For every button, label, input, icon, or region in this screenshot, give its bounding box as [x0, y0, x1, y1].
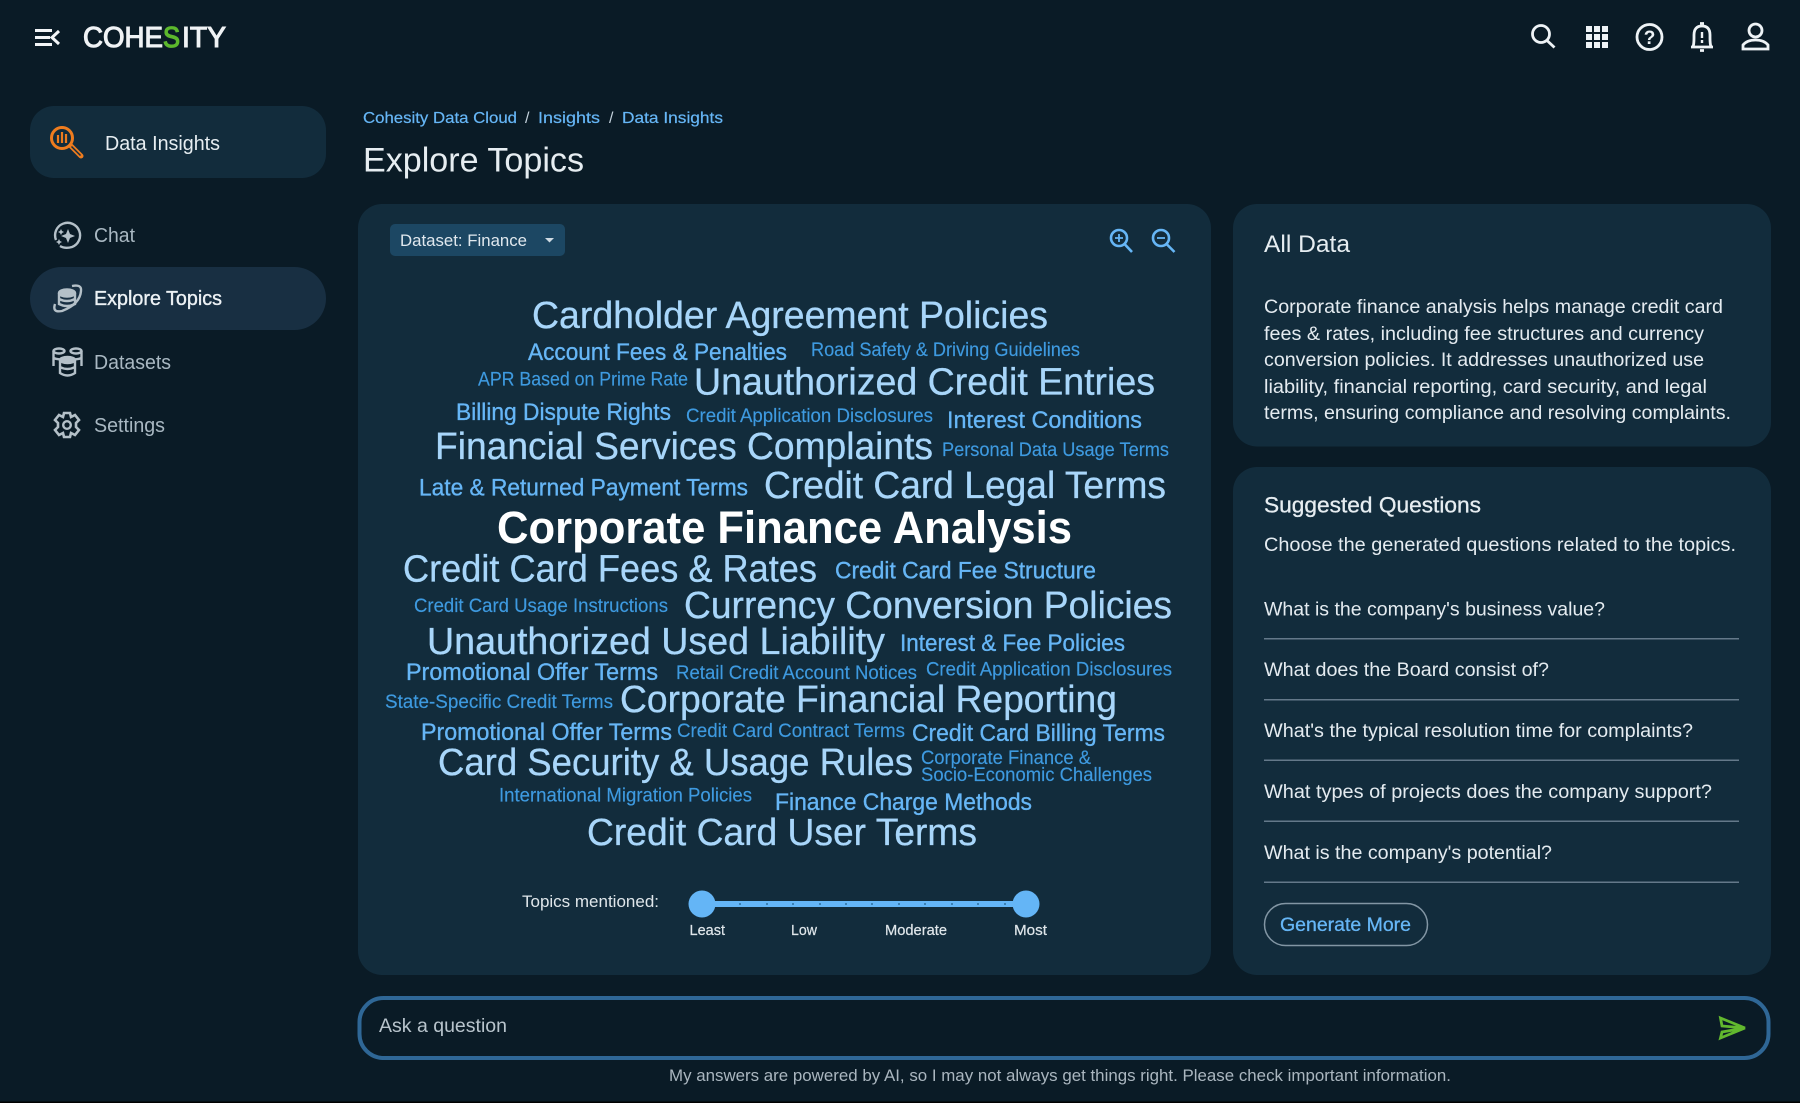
logo: ITY [182, 22, 226, 54]
word cloud: Credit Card Usage Instructions [414, 596, 668, 617]
icon: search [1532, 26, 1554, 48]
word cloud: Credit Card Contract Terms [677, 721, 905, 742]
question list: What types of projects does the company support? [1264, 782, 1712, 803]
question list: What's the typical resolution time for complaints? [1264, 721, 1693, 742]
panel: all data [1233, 204, 1771, 446]
breadcrumb: / [609, 110, 614, 127]
breadcrumb: / [525, 110, 530, 127]
icon: menu toggle [35, 29, 59, 46]
icon: explore topics database [54, 286, 81, 311]
icon: help [1637, 24, 1662, 50]
word cloud: Credit Card Legal Terms [764, 465, 1166, 507]
instruction text: Choose the generated questions related to the topics. [1264, 534, 1736, 556]
word cloud: Road Safety & Driving Guidelines [811, 340, 1080, 361]
summary text: fees & rates, including fee structures and currency [1264, 323, 1704, 345]
page title: Explore Topics [363, 142, 584, 180]
word cloud: Billing Dispute Rights [456, 399, 671, 426]
icon: help: ? [1644, 28, 1655, 49]
logo [83, 22, 226, 54]
legend: topics mentioned slider: Most [1014, 923, 1047, 939]
word cloud [385, 295, 1172, 854]
heading: all data: All Data [1264, 231, 1351, 258]
word cloud: Finance Charge Methods [775, 789, 1032, 816]
icon: zoom in [1111, 230, 1132, 252]
icon: user [1743, 24, 1768, 49]
logo: COHE [83, 22, 163, 54]
nav item: Datasets: Datasets [94, 352, 171, 374]
question list: What is the company's business value? [1264, 600, 1605, 620]
word cloud: Credit Application Disclosures [686, 406, 933, 427]
word cloud: Unauthorized Used Liability [427, 621, 885, 663]
legend: topics mentioned slider: Least [690, 923, 725, 939]
button: generate more [1264, 904, 1428, 946]
legend: topics mentioned slider [522, 890, 1047, 939]
button: generate more: Generate More [1280, 915, 1411, 936]
dataset dropdown [390, 224, 565, 256]
nav item: Datasets [54, 348, 171, 376]
legend: topics mentioned slider: Moderate [885, 923, 947, 939]
word cloud: Credit Card Billing Terms [912, 720, 1165, 747]
nav item: Settings: Settings [94, 415, 165, 437]
dataset dropdown: Dataset: Finance [400, 232, 527, 250]
word cloud: Interest Conditions [947, 407, 1142, 434]
word cloud: Promotional Offer Terms [421, 719, 672, 746]
nav item: Chat: Chat [94, 225, 135, 247]
nav item: Explore Topics [30, 267, 326, 330]
icon: zoom out [1153, 230, 1174, 252]
word cloud: Corporate Financial Reporting [620, 679, 1117, 721]
nav item: Chat [55, 223, 135, 248]
word cloud: Card Security & Usage Rules [438, 742, 913, 784]
icon: data insights magnifier [52, 128, 81, 156]
word cloud: Late & Returned Payment Terms [419, 474, 748, 502]
panel: suggested questions [1233, 467, 1771, 975]
word cloud: Cardholder Agreement Policies [532, 295, 1048, 337]
nav item: Explore Topics: Explore Topics [94, 288, 222, 310]
logo: S [163, 22, 180, 54]
heading: suggested questions: Suggested Questions [1264, 492, 1481, 518]
word cloud: Personal Data Usage Terms [942, 440, 1169, 461]
breadcrumb: Data Insights [622, 110, 723, 127]
word cloud: Credit Card Fees & Rates [403, 548, 817, 590]
word cloud: Retail Credit Account Notices [676, 663, 917, 684]
question list [1264, 600, 1739, 883]
word cloud: Credit Application Disclosures [926, 660, 1172, 680]
word cloud: Unauthorized Credit Entries [694, 362, 1155, 404]
legend: topics mentioned slider: Topics mentioned: [522, 892, 659, 911]
word cloud: Promotional Offer Terms [406, 659, 658, 686]
question list: What does the Board consist of? [1264, 660, 1549, 681]
word cloud: Credit Card User Terms [587, 812, 977, 854]
legend: topics mentioned slider: Low [791, 923, 818, 939]
summary text: terms, ensuring compliance and resolving complaints. [1264, 402, 1731, 424]
word cloud: APR Based on Prime Rate [478, 370, 688, 390]
disclaimer: My answers are powered by AI, so I may not always get things right. Please check important information. [669, 1067, 1451, 1085]
summary text: liability, financial reporting, card security, and legal [1264, 376, 1707, 398]
input: ask a question: Ask a question [379, 1015, 507, 1037]
panel: word cloud [358, 204, 1211, 975]
word cloud: Financial Services Complaints [435, 426, 933, 468]
word cloud: International Migration Policies [499, 786, 752, 806]
nav item: Data Insights: Data Insights [105, 133, 220, 155]
nav item: Settings [55, 413, 165, 437]
word cloud: Currency Conversion Policies [684, 585, 1172, 627]
nav item: Data Insights [30, 106, 326, 178]
input: ask a question [360, 998, 1768, 1058]
summary text [1264, 296, 1731, 424]
breadcrumb: Cohesity Data Cloud [363, 110, 517, 127]
icon: send [1720, 1018, 1745, 1038]
icon: apps grid [1586, 26, 1608, 48]
word cloud: Socio-Economic Challenges [921, 765, 1152, 786]
word cloud: Corporate Finance & [921, 748, 1091, 769]
word cloud: Credit Card Fee Structure [835, 558, 1096, 584]
question list: What is the company's potential? [1264, 843, 1552, 864]
word cloud: Account Fees & Penalties [528, 339, 787, 366]
word cloud: State-Specific Credit Terms [385, 692, 613, 713]
breadcrumb [363, 110, 723, 127]
summary text: conversion policies. It addresses unauthorized use [1264, 349, 1704, 371]
word cloud: Interest & Fee Policies [900, 630, 1125, 657]
word cloud: Corporate Finance Analysis [497, 502, 1072, 553]
summary text: Corporate finance analysis helps manage credit card [1264, 296, 1723, 318]
breadcrumb: Insights [538, 110, 600, 127]
icon: notification bell [1691, 24, 1713, 50]
